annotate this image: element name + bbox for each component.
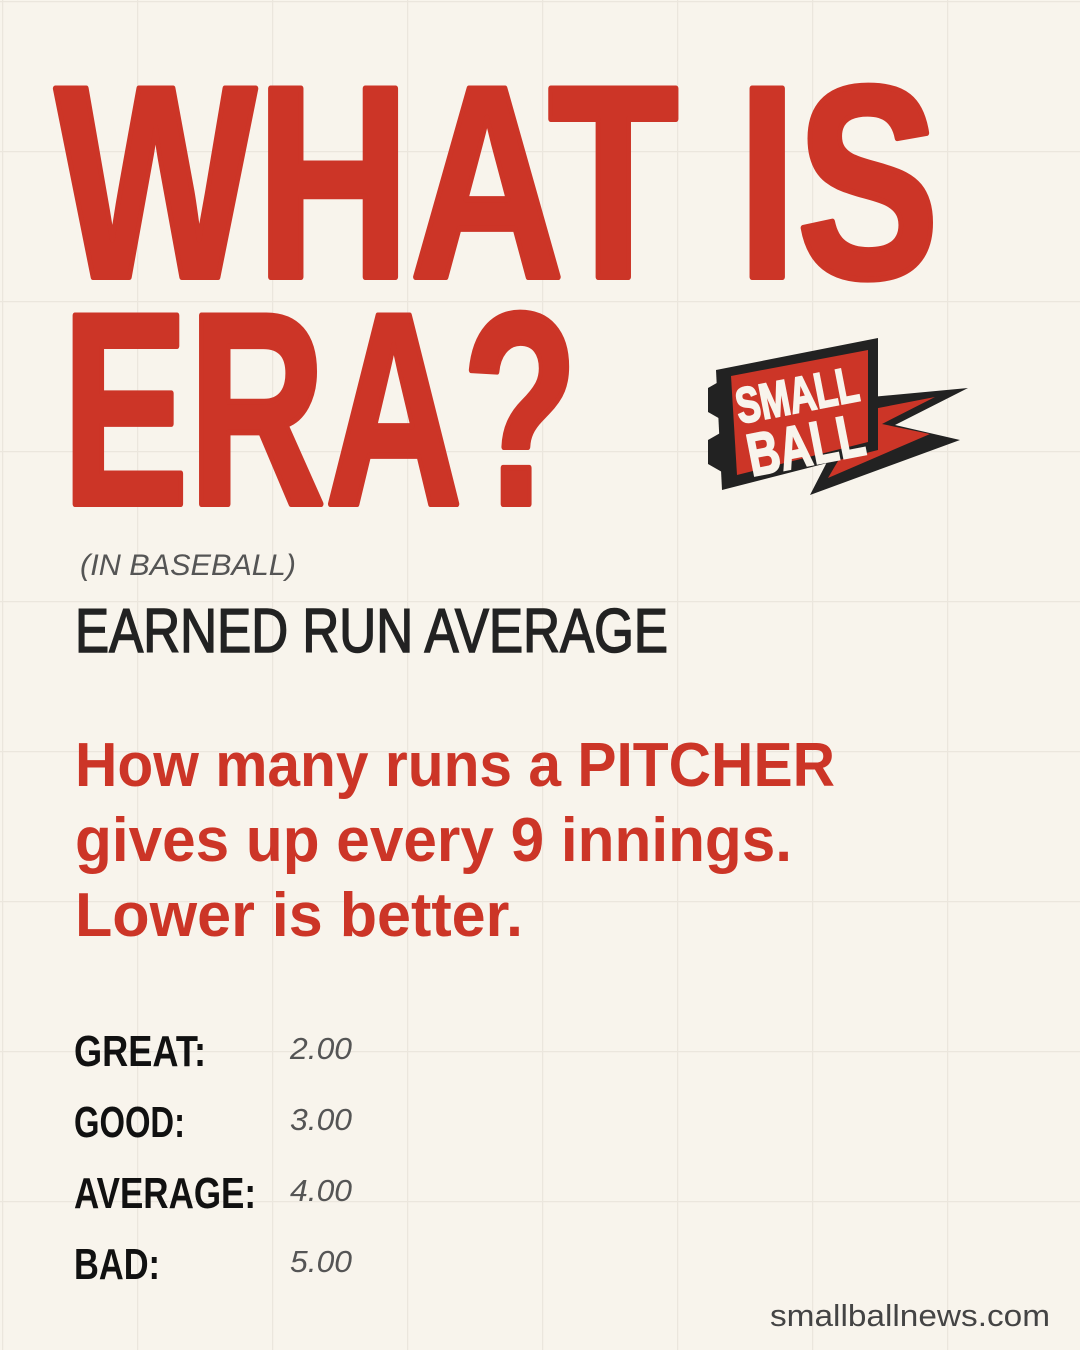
definition text [75, 731, 835, 950]
ERA scale table: 5.00 [290, 1244, 352, 1279]
ERA scale table: GOOD: [74, 1098, 185, 1147]
title [55, 30, 939, 563]
ERA scale table: 3.00 [290, 1102, 352, 1137]
ERA scale table: AVERAGE: [74, 1169, 256, 1218]
definition text: How many runs a PITCHER [75, 731, 835, 800]
ERA scale table: 2.00 [289, 1031, 352, 1066]
heading: earned run average: EARNED RUN AVERAGE [75, 597, 668, 666]
definition text: Lower is better. [75, 881, 523, 950]
logo: Small Ball pennant: BALL [741, 401, 870, 489]
title: ERA? [62, 257, 578, 563]
ERA scale table: GREAT: [74, 1027, 206, 1076]
logo: Small Ball pennant: SMALL [731, 356, 863, 435]
subtitle: in baseball: (IN BASEBALL) [80, 549, 296, 582]
definition text: gives up every 9 innings. [75, 806, 792, 875]
ERA scale table: BAD: [74, 1240, 160, 1289]
footer: website: smallballnews.com [770, 1298, 1050, 1333]
logo: Small Ball pennant [708, 338, 968, 495]
ERA scale table [74, 1027, 352, 1289]
ERA scale table: 4.00 [290, 1173, 352, 1208]
